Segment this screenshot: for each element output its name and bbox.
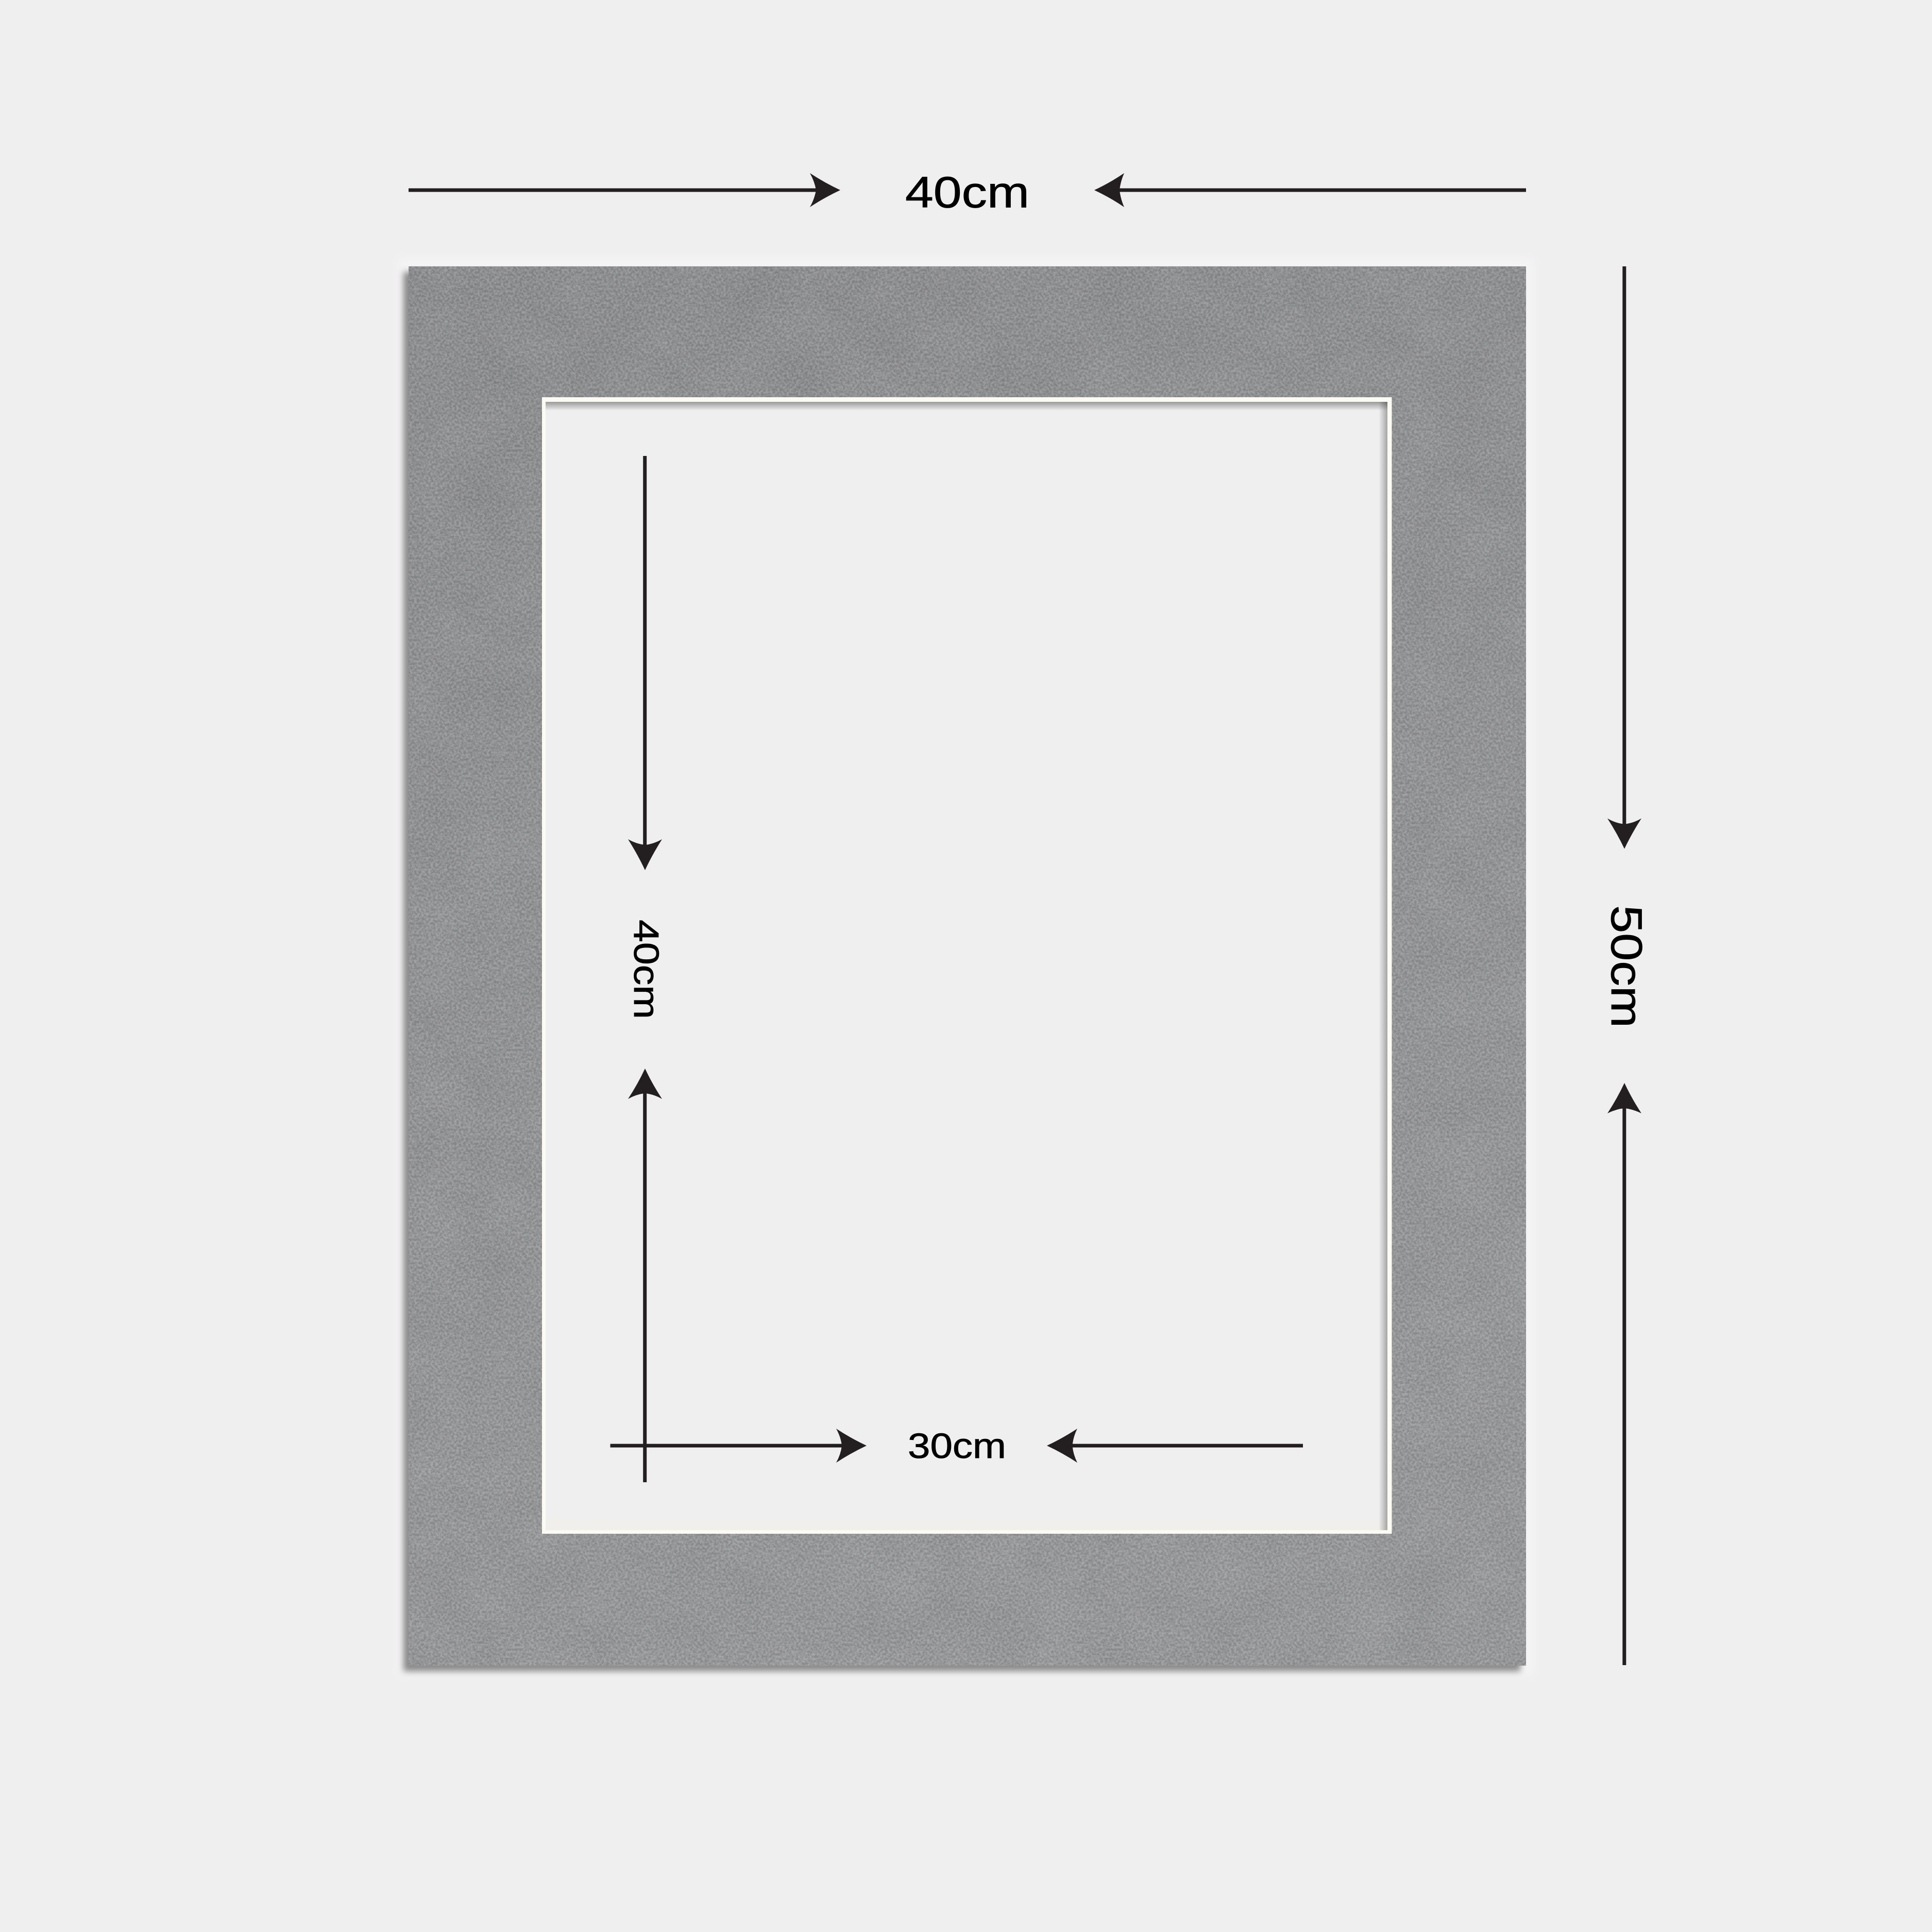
arrow: top left pointing right bbox=[409, 173, 840, 207]
arrow: right top pointing down bbox=[1607, 266, 1641, 849]
inner window opening bbox=[542, 397, 1392, 1534]
arrow: inner left pointing right bbox=[610, 1429, 867, 1463]
inner height dimension: 40cm bbox=[626, 456, 666, 1482]
arrow: inner top pointing down bbox=[628, 456, 662, 870]
arrow: inner right pointing left bbox=[1047, 1429, 1303, 1463]
inner width dimension: 30cm bbox=[610, 1426, 1303, 1466]
top width dimension: 40cm bbox=[409, 168, 1526, 217]
arrow: right bottom pointing up bbox=[1607, 1083, 1641, 1665]
label: outer height: 50cm bbox=[1602, 905, 1651, 1028]
arrow: top right pointing left bbox=[1094, 173, 1526, 207]
mat board frame bbox=[398, 258, 1534, 1675]
infographic canvas bbox=[400, 173, 1642, 1675]
label: outer width: 40cm bbox=[905, 168, 1029, 217]
label: window height: 40cm bbox=[626, 920, 666, 1019]
label: window width: 30cm bbox=[908, 1426, 1006, 1466]
right height dimension: 50cm bbox=[1602, 266, 1651, 1665]
arrow: inner bottom pointing up bbox=[628, 1069, 662, 1482]
